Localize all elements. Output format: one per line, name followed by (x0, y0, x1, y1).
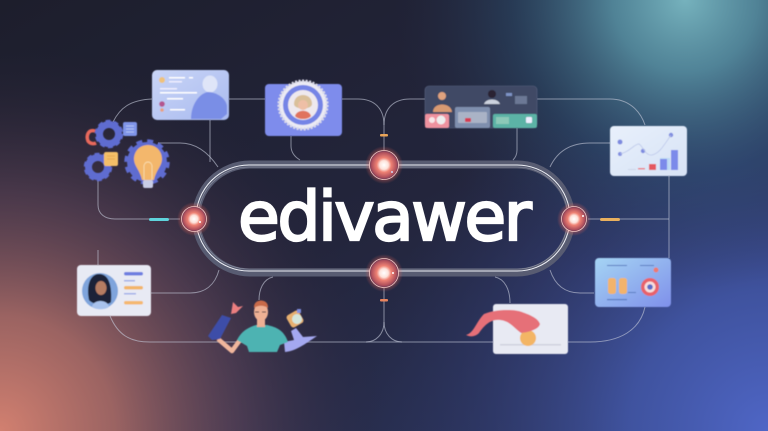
head (254, 303, 268, 321)
glowing node: left (177, 202, 211, 236)
icon: blue note (123, 122, 137, 136)
central pill frame (196, 164, 571, 272)
panel: diagram card right (595, 258, 671, 307)
right purple arm (284, 328, 317, 352)
pink tile (425, 114, 449, 128)
icon: large gear (126, 141, 168, 183)
glowing node: right (557, 202, 591, 236)
panel: portrait badge card (265, 81, 342, 136)
panel: white card with abstract shape (466, 304, 568, 354)
panel: chart card right (610, 126, 687, 176)
teal tile (493, 114, 537, 128)
robotic arm (208, 315, 231, 340)
shirt (237, 325, 288, 352)
heart shaped hand (231, 302, 243, 314)
illustration: person with robotic arms (208, 300, 317, 352)
bottle (285, 309, 305, 329)
icon: small gear top (96, 121, 122, 147)
panel: avatar card left (77, 265, 151, 316)
dash accents (149, 134, 620, 302)
grey tile (455, 107, 490, 128)
icon: small gear bottom (85, 154, 111, 180)
glowing node: top (365, 146, 403, 184)
icon: lightbulb (134, 145, 162, 188)
connector lines (98, 99, 669, 342)
panel: profile card top left (152, 70, 229, 120)
icon: yellow note (104, 152, 118, 166)
icon: gears and lightbulb (85, 121, 168, 188)
hair (254, 300, 268, 308)
icon: red partial gear (87, 131, 96, 144)
glowing node: bottom (365, 254, 403, 292)
title: edivawer: edivawer (238, 178, 532, 257)
neck (257, 318, 265, 327)
panel: dashboard card top (425, 86, 537, 128)
glasses (255, 311, 266, 313)
left skin arm (218, 339, 240, 351)
